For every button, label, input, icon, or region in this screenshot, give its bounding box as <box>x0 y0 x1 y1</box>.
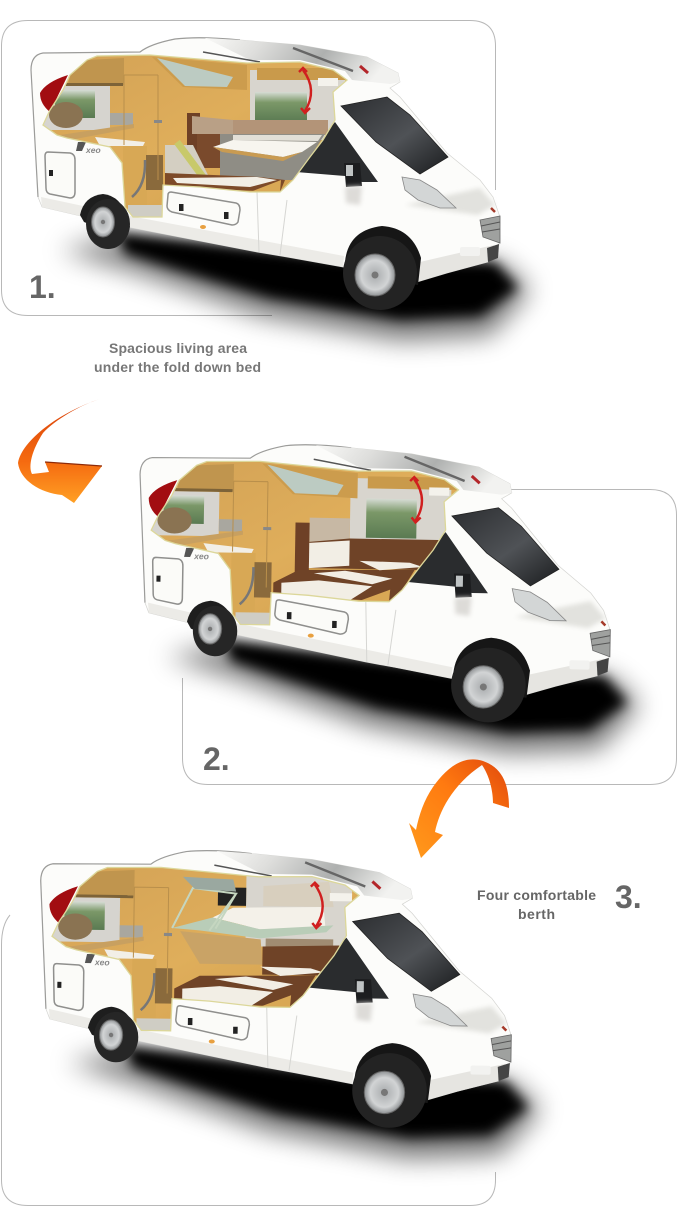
cutaway edge <box>150 460 459 628</box>
panel 1 outline <box>2 20 496 316</box>
panel 2 outline <box>182 490 676 784</box>
interior 3 cutaway <box>53 868 358 1030</box>
van 3: fold-down bed raised <box>37 848 544 1160</box>
caption 1 <box>94 340 261 375</box>
panel 3 outline <box>2 915 496 1206</box>
label 3: 3. <box>615 879 642 915</box>
cutaway edge <box>43 55 347 217</box>
caption 3: Four comfortable <box>477 887 596 903</box>
label 1: 1. <box>29 269 56 305</box>
interior 2 cutaway <box>152 462 458 624</box>
cutaway edge <box>51 866 359 1034</box>
arrow 1 <box>18 399 102 503</box>
red arrow <box>409 477 422 523</box>
van 2: bed configuration <box>135 442 644 755</box>
arrow 2 <box>409 759 509 858</box>
red arrow <box>299 68 311 113</box>
interior 1 cutaway <box>40 50 350 220</box>
caption 3 <box>477 887 596 922</box>
label 2: 2. <box>203 741 230 777</box>
caption 3: berth <box>518 906 555 922</box>
red arrow <box>310 883 323 928</box>
caption 1: Spacious living area <box>109 340 247 356</box>
van 1: living area configuration <box>31 38 530 340</box>
caption 1: under the fold down bed <box>94 359 261 375</box>
